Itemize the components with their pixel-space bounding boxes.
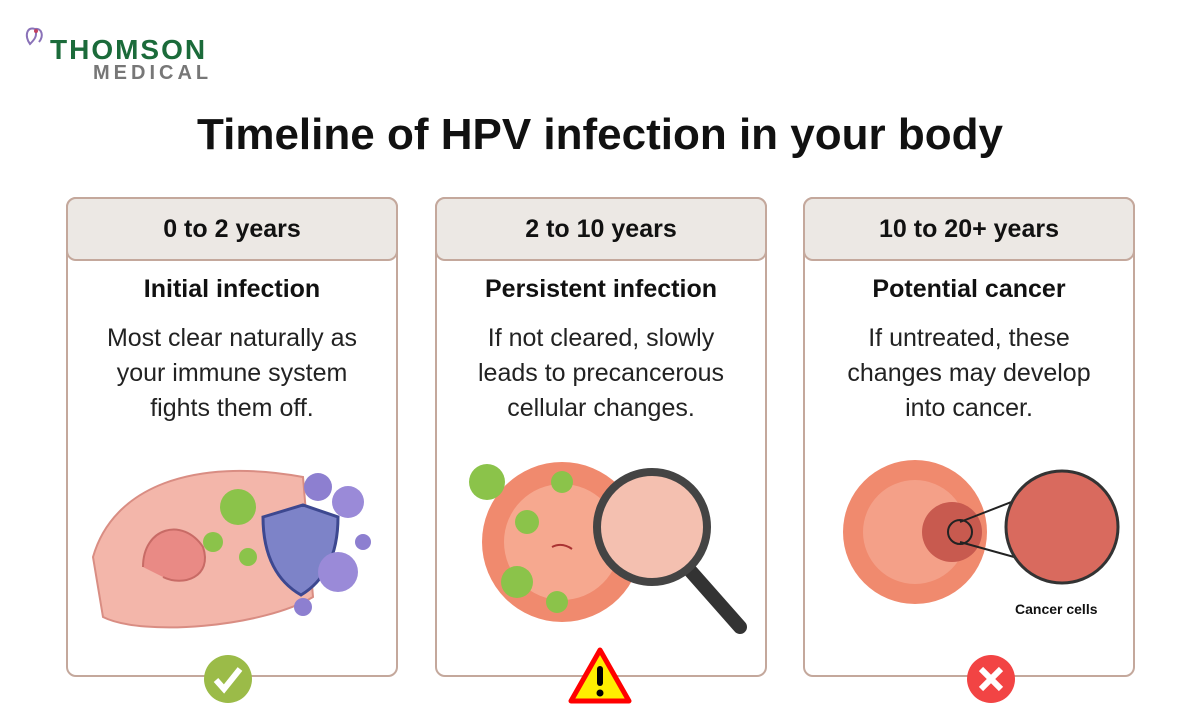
header: 0 to 2 years [66, 197, 398, 261]
panel: 10 to 20+ years [803, 197, 1135, 677]
logo: THOMSON [50, 34, 207, 65]
header: 10 to 20+ years: 10 to 20+ years [879, 215, 1059, 243]
subheading: Potential cancer [872, 275, 1066, 303]
text block: If untreated, these changes may develop into cancer. [847, 324, 1091, 422]
illustration: cervix with magnifier [469, 462, 747, 634]
header: 2 to 10 years: 2 to 10 years [525, 215, 677, 243]
icon: check [204, 655, 252, 703]
title: Timeline of HPV infection in your body [197, 110, 1003, 159]
text block: If not cleared, slowly leads to precancerous cellular changes. [478, 324, 724, 422]
subheading: Initial infection [144, 275, 320, 303]
header: 0 to 2 years: 0 to 2 years [163, 215, 301, 243]
logo [26, 28, 212, 84]
header: 10 to 20+ years [803, 197, 1135, 261]
panel: 2 to 10 years [435, 197, 767, 677]
panel: 0 to 2 years [66, 197, 398, 677]
icon: cross [967, 655, 1015, 703]
illustration: immune system [92, 470, 371, 628]
logo: MEDICAL [93, 62, 212, 84]
subheading: Persistent infection [485, 275, 717, 303]
illustration: cancer cells: Cancer cells [1015, 601, 1098, 617]
icon: warning [568, 648, 632, 704]
text block: Most clear naturally as your immune system fights them off. [107, 324, 357, 422]
header: 2 to 10 years [435, 197, 767, 261]
illustration: cancer cells [843, 460, 1120, 617]
icon: logo butterfly [26, 28, 43, 46]
